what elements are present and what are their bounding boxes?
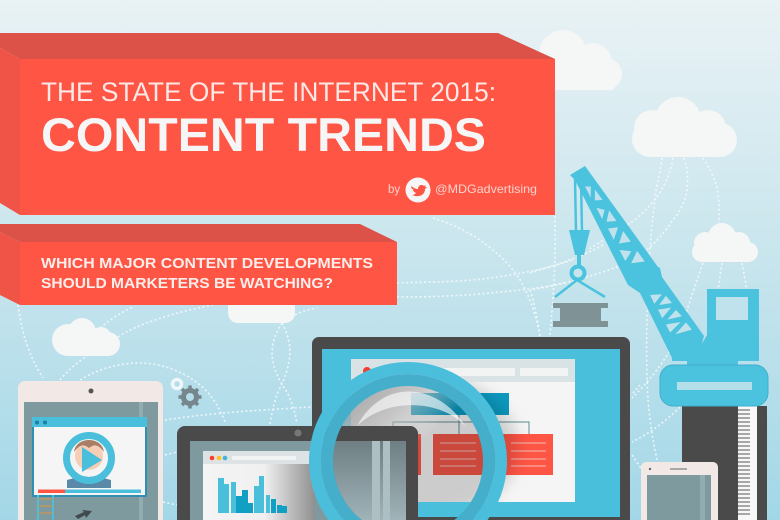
lens shadow xyxy=(351,382,522,502)
small white gear xyxy=(172,380,182,388)
dotted network lines xyxy=(18,158,747,505)
magnifying lens xyxy=(309,362,507,520)
icon: arrow xyxy=(75,510,92,519)
chart window xyxy=(203,451,315,520)
cloud: right small xyxy=(692,223,758,262)
left tablet xyxy=(18,381,163,520)
bar chart xyxy=(218,476,287,513)
cloud: behind title banner xyxy=(530,30,622,90)
flow chart xyxy=(336,393,553,475)
twitter handle: @MDGadvertising xyxy=(435,182,537,196)
cloud: upper right xyxy=(632,97,737,157)
grey gear xyxy=(178,386,202,408)
cloud: behind subtitle banner xyxy=(228,296,295,323)
crane xyxy=(553,166,768,520)
crane cabin xyxy=(672,289,759,365)
browser window xyxy=(351,359,575,502)
crane hook and cable xyxy=(555,178,605,297)
video player window xyxy=(32,417,147,497)
subtitle banner: SHOULD MARKETERS BE WATCHING? xyxy=(41,275,333,292)
crane base xyxy=(660,365,768,406)
cloud: left xyxy=(52,318,120,356)
icon: twitter badge xyxy=(406,178,430,202)
title line two: CONTENT TRENDS xyxy=(41,108,486,161)
subtitle text: WHICH MAJOR CONTENT DEVELOPMENTS xyxy=(41,255,373,272)
subtitle banner xyxy=(0,224,397,305)
title line one: THE STATE OF THE INTERNET 2015: xyxy=(41,77,496,107)
crane boom xyxy=(570,166,704,358)
lens view of tablet xyxy=(333,426,418,520)
byline: by xyxy=(388,184,400,196)
lens glare xyxy=(357,392,466,427)
dark tablet xyxy=(177,426,418,520)
ladder xyxy=(38,495,53,520)
presenter xyxy=(67,476,111,488)
phone xyxy=(641,462,718,520)
play button xyxy=(66,436,112,480)
crane steel beam xyxy=(553,303,608,327)
crane tower xyxy=(682,406,767,520)
large laptop xyxy=(312,337,630,520)
progress bar xyxy=(38,490,65,493)
title banner xyxy=(0,33,555,215)
